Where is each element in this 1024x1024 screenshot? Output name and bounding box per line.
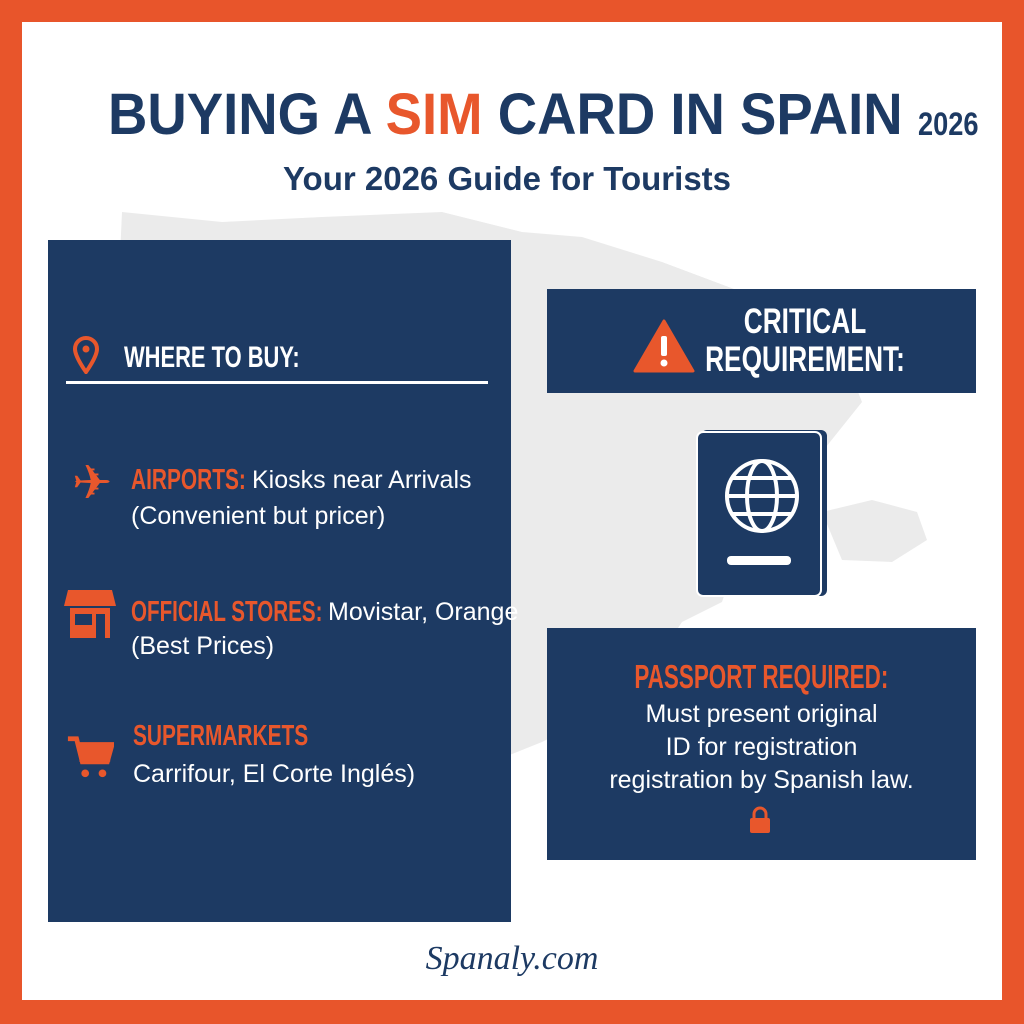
- heading: passport required: PASSPORT REQUIRED:: [634, 658, 888, 695]
- item: official stores: Movistar, Orange: [328, 598, 518, 626]
- panel: where to buy: [48, 240, 511, 922]
- item: official stores: [131, 596, 518, 660]
- icon: airplane: ✈: [72, 457, 112, 510]
- item: airports: AIRPORTS:: [131, 464, 246, 496]
- icon: location pin: [73, 336, 99, 374]
- item: official stores: OFFICIAL STORES:: [131, 596, 322, 628]
- icon: store: [64, 590, 116, 638]
- item: airports: [131, 464, 472, 530]
- item: airports: (Convenient but pricer): [131, 502, 385, 530]
- text: passport details: Must present original: [645, 700, 878, 728]
- title: BUYING A SIM CARD IN SPAIN: [108, 82, 903, 147]
- heading: critical requirement: [705, 302, 905, 379]
- heading: critical requirement: REQUIREMENT:: [705, 340, 905, 379]
- panel: critical requirement: [547, 289, 976, 393]
- text: passport details: ID for registration: [666, 733, 857, 761]
- text: passport details: [609, 700, 914, 794]
- title: 2026: [918, 106, 979, 142]
- panel: passport required: [547, 628, 976, 860]
- heading: where to buy: WHERE TO BUY:: [124, 341, 300, 374]
- footer: Spanaly.com: Spanaly.com: [426, 940, 598, 977]
- heading: critical requirement: CRITICAL: [744, 302, 866, 341]
- icon: warning: [634, 319, 695, 372]
- icon: cart: [68, 736, 114, 778]
- item: supermarkets: Carrifour, El Corte Inglés): [133, 760, 415, 788]
- item: supermarkets: SUPERMARKETS: [133, 720, 308, 752]
- subtitle: Your 2026 Guide for Tourists: [283, 160, 731, 197]
- icon: passport: [696, 430, 827, 597]
- item: supermarkets: [133, 720, 415, 788]
- text: passport details: registration by Spanish law.: [609, 766, 914, 794]
- item: official stores: (Best Prices): [131, 632, 274, 660]
- icon: lock: [750, 806, 770, 833]
- item: airports: Kiosks near Arrivals: [252, 466, 472, 494]
